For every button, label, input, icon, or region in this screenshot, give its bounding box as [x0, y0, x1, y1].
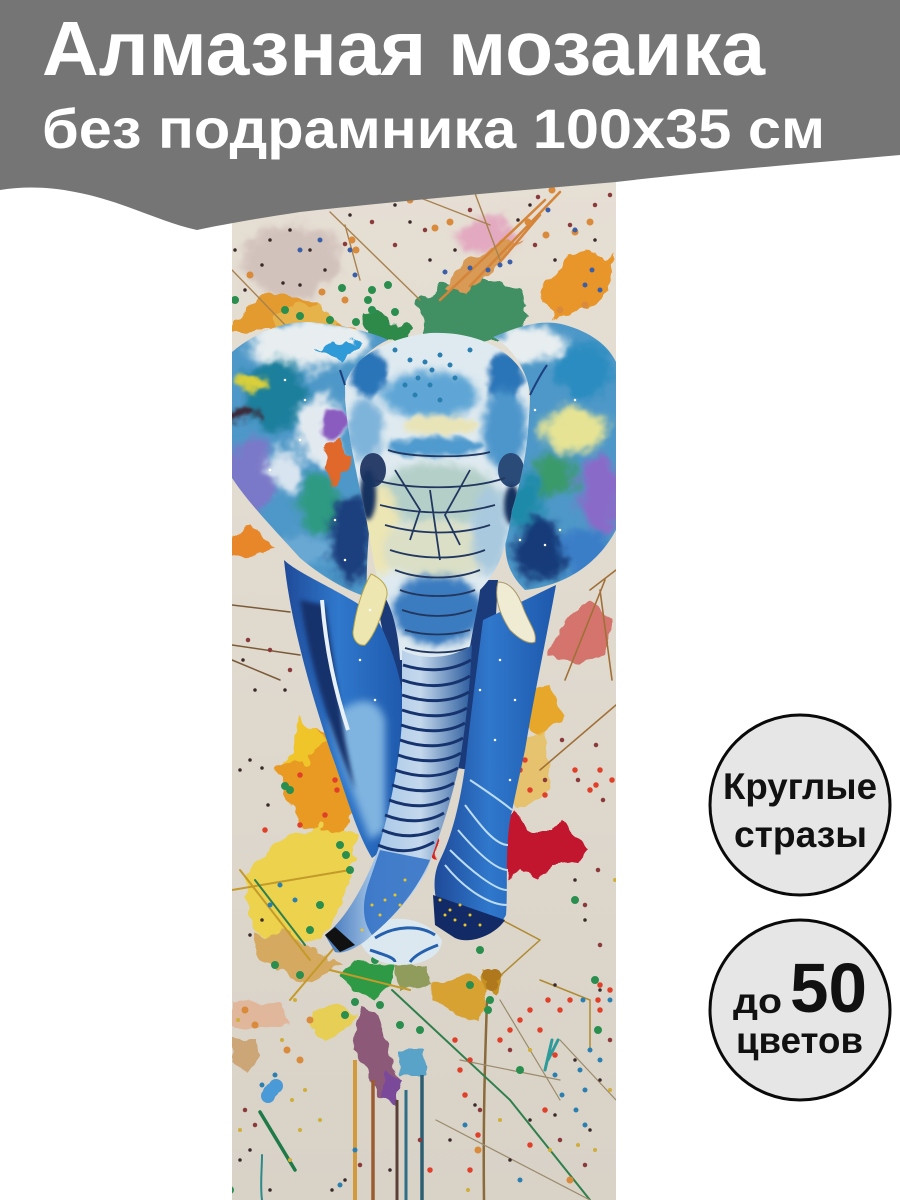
left edge orange blot	[232, 525, 275, 558]
paint splashes behind the elephant	[230, 180, 616, 1200]
title line 2: без подрамника 100х35 см	[42, 97, 825, 160]
trunk	[325, 645, 472, 953]
left foot shading	[370, 928, 438, 962]
left foot	[358, 919, 442, 965]
left leg highlight	[330, 701, 385, 840]
badge: up to 50 colours	[710, 920, 890, 1100]
lower left yellow splash	[240, 712, 355, 985]
purple and blue drips	[352, 1000, 487, 1200]
left tusk	[353, 574, 387, 645]
right foot dark	[433, 895, 505, 940]
badge circle	[710, 920, 890, 1100]
badge text line 1: Круглые	[723, 766, 877, 807]
badge circle	[710, 715, 890, 895]
right foot yellow specks	[440, 900, 480, 925]
navy shadow under head	[372, 580, 498, 770]
under foot splash	[232, 960, 505, 1075]
back legs	[284, 560, 556, 965]
head	[345, 332, 529, 660]
left ear	[232, 322, 388, 595]
badge word: цветов: цветов	[736, 1020, 863, 1061]
right red splash	[420, 600, 612, 880]
trunk wrinkles	[378, 660, 471, 851]
badge: round rhinestones	[710, 715, 890, 895]
white body speckles	[270, 380, 575, 780]
trunk yellow specks	[362, 880, 405, 930]
splatter dots	[230, 190, 615, 1190]
painting: splatter elephant	[232, 182, 616, 1200]
right leg wrinkles	[445, 780, 512, 905]
upper splashes	[232, 218, 612, 340]
right tusk	[497, 582, 535, 643]
left leg outer dark	[300, 600, 355, 790]
left leg white stripe	[322, 600, 348, 730]
badge number: 50: 50	[790, 949, 867, 1027]
right ear	[493, 322, 616, 590]
trunk tip	[325, 927, 355, 952]
badge text line 2: стразы	[734, 814, 867, 855]
right leg	[435, 585, 556, 936]
header banner	[0, 0, 900, 230]
title line 1: Алмазная мозаика	[42, 6, 766, 92]
canvas background	[232, 170, 616, 1200]
badge word: до: до	[733, 982, 782, 1021]
grey banner shape	[0, 0, 900, 230]
thin paint strokes	[232, 180, 616, 1200]
ear fold lines	[340, 365, 547, 395]
elephant	[232, 322, 616, 965]
trunk lower blue	[364, 850, 430, 935]
left leg	[284, 560, 405, 858]
